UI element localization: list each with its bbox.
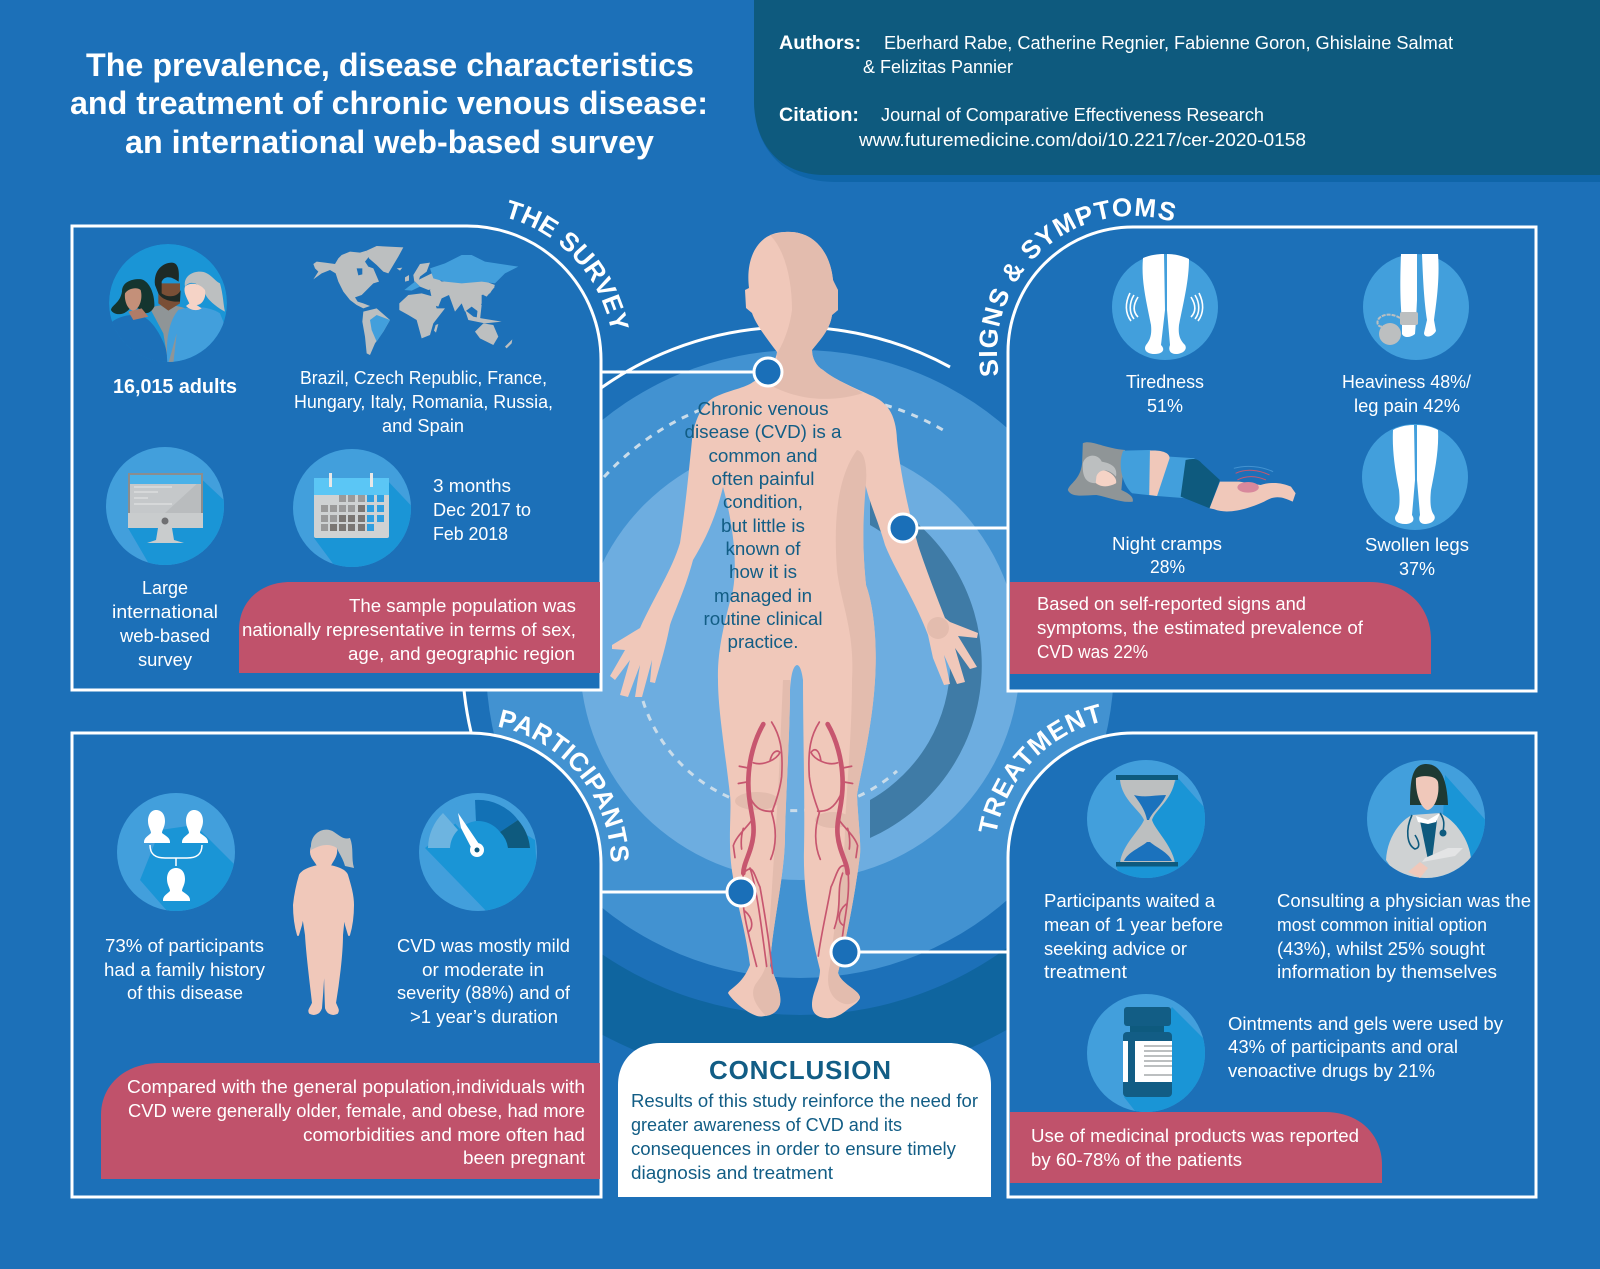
callout: medicinal products xyxy=(1010,1112,1382,1183)
heading: the survey: THE SURVEY xyxy=(508,200,629,328)
panel: conclusion: diagnosis and treatment xyxy=(631,1162,833,1183)
text: severity: >1 year’s duration xyxy=(410,1006,558,1027)
header panel: authors and citation: www.futuremedicine.com/doi/10.2217/cer-2020-0158 xyxy=(858,129,1306,150)
text: severity: severity (88%) and of xyxy=(397,982,571,1003)
icon: family tree xyxy=(117,793,235,911)
panel: conclusion xyxy=(618,1043,991,1197)
icon: hourglass xyxy=(1087,760,1205,878)
callout: sample population: nationally representative in terms of sex, xyxy=(242,619,576,640)
heading: participants: PARTICIPANTS xyxy=(498,710,629,862)
icon: calendar xyxy=(293,449,411,567)
text: waiting time: Participants waited a xyxy=(1044,890,1216,911)
text: swollen legs: 37% xyxy=(1399,558,1435,579)
text: swollen legs xyxy=(1365,534,1469,579)
body explanation text: how it is xyxy=(729,562,797,582)
callout: sample population: The sample population was xyxy=(349,595,576,616)
text: family history: of this disease xyxy=(127,982,243,1003)
body explanation text: managed in xyxy=(714,586,812,606)
text: ointments: venoactive drugs by 21% xyxy=(1228,1060,1435,1081)
icon: female figure xyxy=(294,830,354,1014)
text: heaviness: leg pain 42% xyxy=(1354,395,1460,416)
connector: treatment to body xyxy=(831,938,1008,966)
icon: severity gauge xyxy=(419,793,540,920)
text: physician consultation: information by themselves xyxy=(1277,961,1497,982)
body explanation text: Chronic venous xyxy=(698,399,828,419)
text: waiting time: mean of 1 year before xyxy=(1044,914,1223,935)
text: adults count: 16,015 adults xyxy=(113,376,237,398)
header panel: authors and citation: Journal of Comparative Effectiveness Research xyxy=(881,104,1264,125)
panel: participants xyxy=(70,710,629,1198)
text: family history: had a family history xyxy=(104,959,266,980)
text: countries: Brazil, Czech Republic, France, xyxy=(300,367,547,388)
text: family history xyxy=(104,935,266,1003)
text: family history: 73% of participants xyxy=(105,935,264,956)
icon: woman with night cramps xyxy=(1068,442,1296,511)
body explanation text: practice. xyxy=(728,632,798,652)
panel: conclusion: consequences in order to ensure timely xyxy=(631,1138,957,1159)
title: an international web-based survey xyxy=(125,124,654,160)
text: tiredness: 51% xyxy=(1147,395,1183,416)
icon: medicine bottle xyxy=(1087,994,1205,1112)
callout: comparison with general population: CVD were generally older, female, and obese, had more xyxy=(128,1100,585,1121)
title: and treatment of chronic venous disease: xyxy=(70,85,708,121)
text: ointments: Ointments and gels were used by xyxy=(1228,1013,1504,1034)
text: swollen legs: Swollen legs xyxy=(1365,534,1469,555)
body explanation text: often painful xyxy=(712,469,814,489)
central concentric circles xyxy=(462,327,1113,1050)
icon: world map xyxy=(313,246,518,355)
text: duration: Dec 2017 to xyxy=(433,499,531,520)
text: duration: 3 months xyxy=(433,475,511,496)
text: ointments xyxy=(1228,1013,1504,1081)
title: The prevalence, disease characteristics xyxy=(86,47,694,83)
text: physician consultation xyxy=(1277,890,1531,982)
body explanation text: but little is xyxy=(721,516,805,536)
icon: computer monitor xyxy=(106,447,224,565)
icon: tired legs xyxy=(1112,254,1218,360)
text: waiting time xyxy=(1044,890,1223,982)
text: survey type: international xyxy=(112,601,218,622)
icon: physician xyxy=(1367,760,1490,880)
text: night cramps: 28% xyxy=(1150,556,1185,577)
callout: prevalence: Based on self-reported signs and xyxy=(1037,593,1306,614)
header panel: authors and citation: & Felizitas Pannier xyxy=(863,56,1013,77)
title xyxy=(70,47,708,160)
icon: swollen legs xyxy=(1362,424,1468,530)
text: physician consultation: most common initial option xyxy=(1277,914,1487,935)
text: countries: and Spain xyxy=(382,415,464,436)
heading: treatment: TREATMENT xyxy=(978,704,1100,832)
text: duration xyxy=(433,475,531,544)
connector: signs to body xyxy=(889,514,1008,542)
callout: sample population: age, and geographic region xyxy=(348,643,575,664)
callout: prevalence xyxy=(1010,582,1431,674)
text: night cramps xyxy=(1112,533,1222,577)
text: waiting time: treatment xyxy=(1044,961,1127,982)
text: waiting time: seeking advice or xyxy=(1044,938,1187,959)
callout: prevalence: symptoms, the estimated prevalence of xyxy=(1037,617,1364,638)
callout: medicinal products: Use of medicinal products was reported xyxy=(1031,1125,1359,1146)
body explanation text: disease (CVD) is a xyxy=(684,422,843,442)
connector: survey to body xyxy=(601,358,782,386)
text: severity: or moderate in xyxy=(422,959,544,980)
text: heaviness xyxy=(1342,371,1472,416)
body explanation text xyxy=(684,399,843,652)
text: survey type: web-based xyxy=(119,625,210,646)
text: survey type: survey xyxy=(138,649,193,670)
panel: conclusion: CONCLUSION xyxy=(709,1055,891,1085)
body explanation text: common and xyxy=(708,446,818,466)
text: tiredness: Tiredness xyxy=(1126,371,1204,392)
text: ointments: 43% of participants and oral xyxy=(1228,1036,1458,1057)
callout: comparison with general population xyxy=(101,1063,600,1179)
icon: people group xyxy=(109,244,227,362)
text: survey type xyxy=(112,577,218,670)
text: countries xyxy=(294,367,553,436)
header panel: authors and citation xyxy=(754,0,1600,182)
header panel: authors and citation: Citation: xyxy=(779,105,859,126)
text: survey type: Large xyxy=(142,577,188,598)
panel: conclusion: Results of this study reinforce the need for xyxy=(631,1090,978,1111)
human body figure xyxy=(610,232,978,1018)
icon: heavy legs with ball and chain xyxy=(1363,254,1469,360)
heading: signs and symptoms: SIGNS & SYMPTOMS xyxy=(979,198,1176,376)
veins xyxy=(733,722,858,973)
text: severity xyxy=(397,935,571,1027)
text: tiredness xyxy=(1126,371,1204,416)
panel: signs and symptoms xyxy=(979,198,1538,692)
callout: prevalence: CVD was 22% xyxy=(1037,641,1148,662)
panel: the survey xyxy=(70,200,629,692)
text: heaviness: Heaviness 48%/ xyxy=(1342,371,1472,392)
text: severity: CVD was mostly mild xyxy=(397,935,570,956)
text: physician consultation: Consulting a physician was the xyxy=(1277,890,1531,911)
callout: comparison with general population: been pregnant xyxy=(463,1147,585,1168)
callout: medicinal products: by 60-78% of the patients xyxy=(1031,1149,1242,1170)
body explanation text: known of xyxy=(726,539,802,559)
body explanation text: routine clinical xyxy=(704,609,822,629)
callout: comparison with general population: Compared with the general population,individuals with xyxy=(127,1076,585,1097)
text: countries: Hungary, Italy, Romania, Russia, xyxy=(294,391,553,412)
connector: participants to body xyxy=(601,878,755,906)
body explanation text: condition, xyxy=(723,492,803,512)
callout: sample population xyxy=(239,582,600,673)
panel: conclusion: greater awareness of CVD and its xyxy=(631,1114,902,1135)
panel: treatment xyxy=(978,704,1538,1198)
header panel: authors and citation: Authors: xyxy=(779,33,861,54)
text: physician consultation: (43%), whilst 25% sought xyxy=(1277,938,1485,959)
text: duration: Feb 2018 xyxy=(433,523,508,544)
callout: comparison with general population: comorbidities and more often had xyxy=(303,1124,585,1145)
header panel: authors and citation: Eberhard Rabe, Catherine Regnier, Fabienne Goron, Ghislaine Salmat xyxy=(884,32,1453,53)
text: night cramps: Night cramps xyxy=(1112,533,1222,554)
